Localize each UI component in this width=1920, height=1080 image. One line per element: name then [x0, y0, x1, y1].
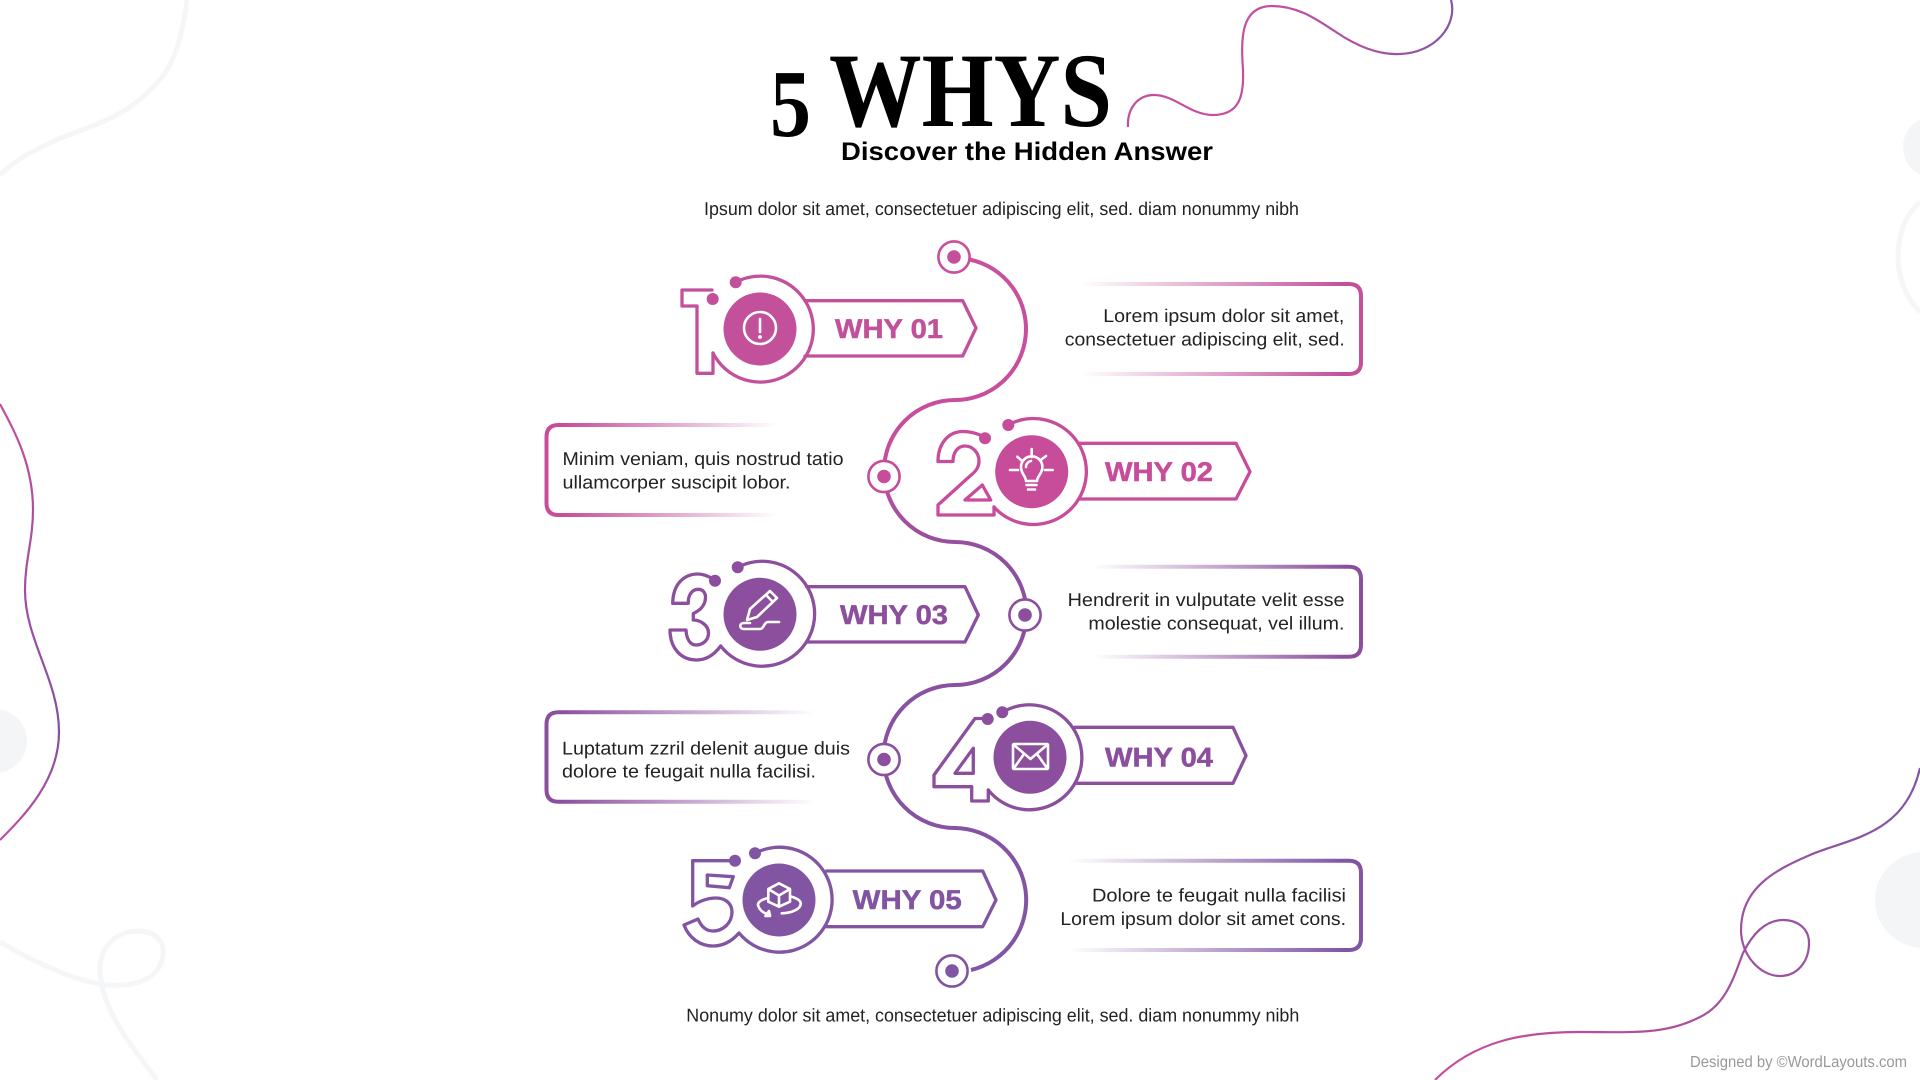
label tag	[1075, 727, 1246, 783]
text panel 3: molestie consequat, vel illum.	[1088, 612, 1344, 633]
icon: pencil	[724, 578, 796, 651]
decorative curve: bottom right with loop	[1435, 768, 1920, 1080]
node 3	[1009, 599, 1041, 631]
tag label: WHY 01	[835, 314, 943, 344]
text panel 2: Minim veniam, quis nostrud tatio	[562, 448, 844, 469]
label tag	[805, 301, 976, 356]
tag label: WHY 04	[1105, 742, 1213, 772]
node 1	[938, 241, 970, 273]
intro text: Ipsum dolor sit amet, consectetuer adipiscing elit, sed. diam nonummy nibh	[704, 198, 1299, 219]
text panel 5: Lorem ipsum dolor sit amet cons.	[1060, 908, 1346, 929]
label tag	[1080, 443, 1250, 499]
label tag	[827, 871, 996, 927]
numeral 1 outline	[682, 290, 713, 373]
decorative curve: top right	[1128, 0, 1452, 127]
text panel 5: Dolore te feugait nulla facilisi	[1092, 885, 1346, 906]
text panel 4: Luptatum zzril delenit augue duis	[562, 737, 850, 758]
step 1: WHY 01	[682, 276, 976, 382]
ring	[713, 276, 813, 382]
numeral 4 outline	[934, 718, 988, 801]
text panel 5	[1060, 861, 1361, 950]
icon: light bulb	[995, 435, 1068, 508]
numeral 5 outline	[684, 861, 739, 946]
text panel 1	[1065, 284, 1361, 374]
subtitle: Discover the Hidden Answer	[841, 138, 1213, 166]
text panel 4: dolore te feugait nulla facilisi.	[562, 760, 816, 781]
icon: envelope	[994, 721, 1066, 794]
text panel 1: Lorem ipsum dolor sit amet,	[1103, 305, 1344, 326]
text panel 3: Hendrerit in vulputate velit esse	[1068, 589, 1345, 610]
title	[770, 32, 1112, 157]
text panel 4	[546, 712, 850, 802]
node 5	[936, 955, 968, 987]
ring dots	[982, 706, 1008, 725]
ring dots	[707, 276, 742, 305]
icon: rotating cube	[742, 864, 816, 936]
ring	[739, 847, 832, 952]
numeral 3 outline	[670, 574, 721, 660]
tag label: WHY 02	[1105, 457, 1213, 487]
text panel 2	[546, 425, 844, 515]
title: 5	[770, 50, 811, 157]
tag label: WHY 03	[840, 600, 948, 630]
ring	[988, 705, 1082, 810]
title: WHYS	[829, 32, 1112, 149]
label tag	[807, 587, 978, 642]
node 4	[868, 744, 900, 775]
step 2: WHY 02	[938, 419, 1250, 525]
decorative curve: left	[0, 404, 59, 840]
ring dots	[979, 419, 1014, 444]
serpentine connector with nodes	[868, 241, 1041, 987]
text panel 3	[1068, 567, 1361, 657]
ring dots	[729, 847, 761, 867]
watermark: Designed by ©WordLayouts.com	[1690, 1054, 1907, 1071]
step 4: WHY 04	[934, 705, 1246, 810]
ring	[721, 561, 815, 666]
ring dots	[709, 561, 744, 587]
step 5: WHY 05	[684, 847, 996, 952]
ring	[994, 419, 1086, 525]
closing text: Nonumy dolor sit amet, consectetuer adipiscing elit, sed. diam nonummy nibh	[686, 1005, 1299, 1026]
tag label: WHY 05	[853, 885, 962, 915]
step 3: WHY 03	[670, 561, 978, 666]
text panel 1: consectetuer adipiscing elit, sed.	[1065, 328, 1345, 349]
text panel 2: ullamcorper suscipit lobor.	[562, 471, 790, 492]
icon: exclamation	[724, 292, 796, 366]
node 2	[868, 461, 900, 492]
numeral 2 outline	[938, 432, 994, 515]
